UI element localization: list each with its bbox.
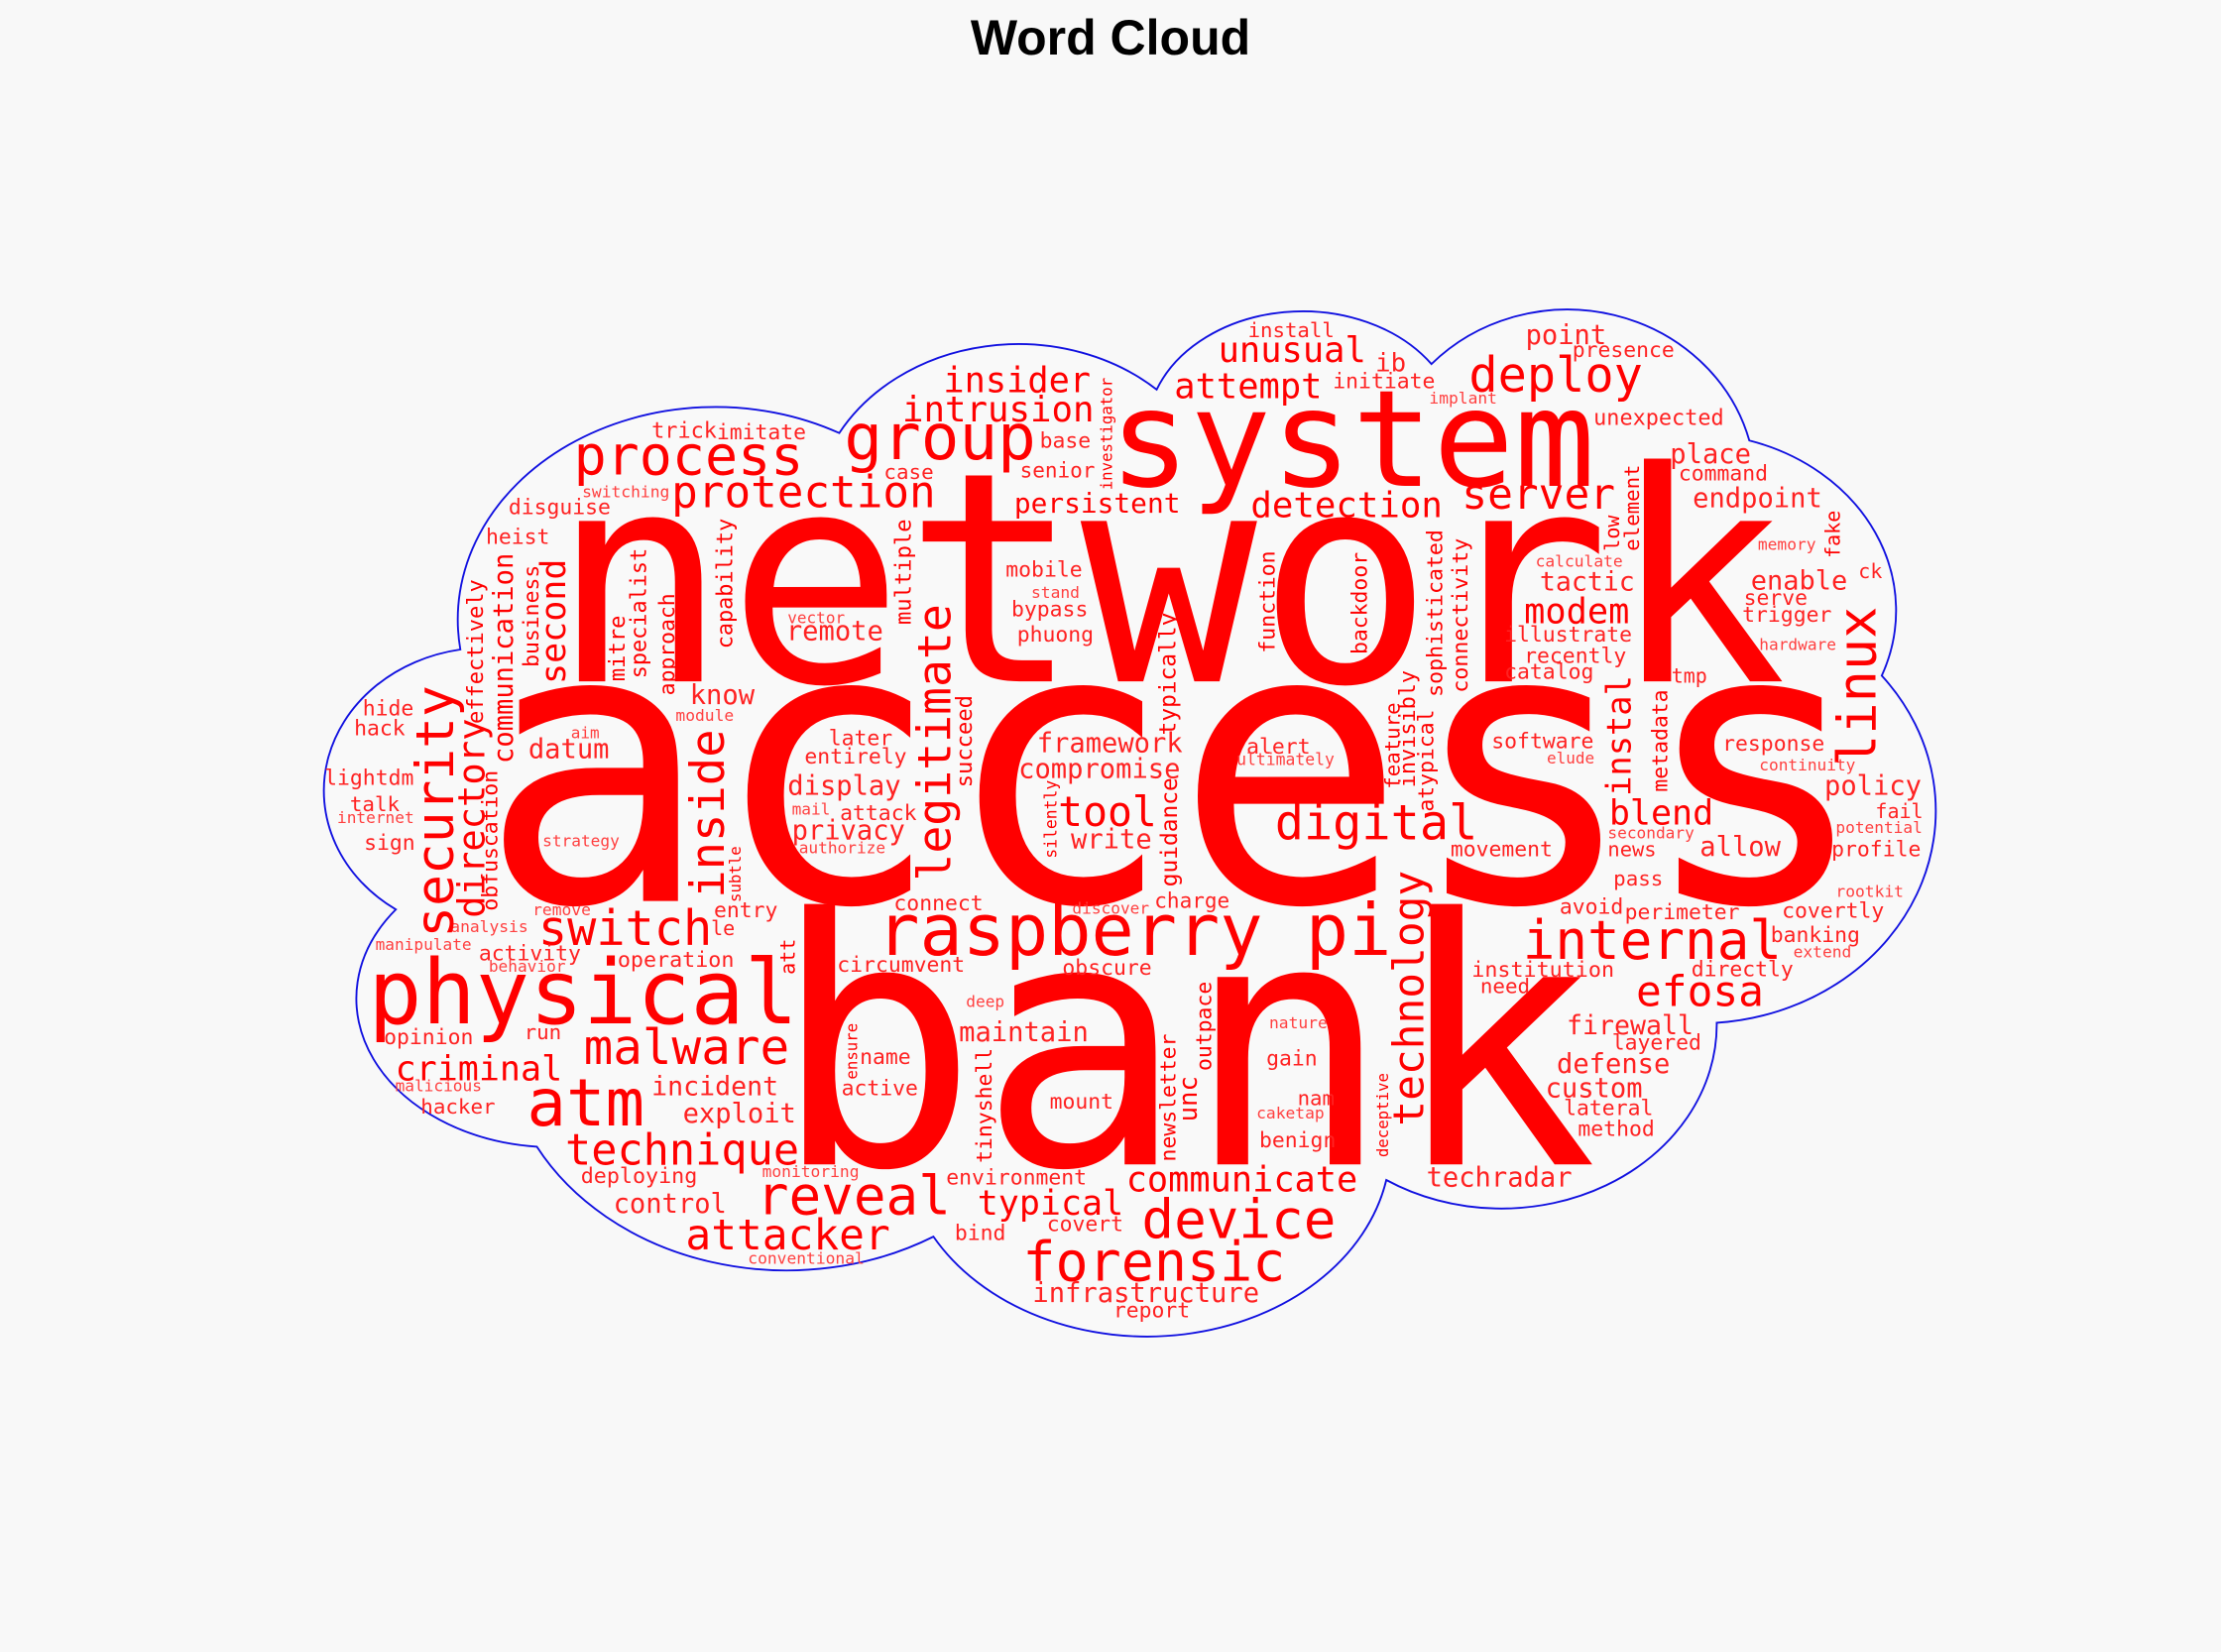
vertical words, right part: instal <box>1599 675 1638 796</box>
small horizontal words, left part: display <box>787 770 901 801</box>
word: process: process <box>574 424 803 488</box>
word: efosa: efosa <box>1636 967 1764 1016</box>
small horizontal words, left part: circumvent <box>837 953 965 978</box>
vertical words, left part: succeed <box>952 695 978 787</box>
word: deploy: deploy <box>1468 348 1643 404</box>
small horizontal words, right part: initiate <box>1333 369 1435 394</box>
tiny faded words: nature <box>1269 1013 1328 1032</box>
word: physical: physical <box>368 941 798 1045</box>
small horizontal words, left part: opinion <box>384 1025 473 1050</box>
vertical words, right part: sophisticated <box>1423 530 1448 697</box>
small horizontal words, left part <box>324 418 1259 1324</box>
word: bank: bank <box>772 846 1597 1245</box>
small horizontal words, left part: control <box>614 1189 727 1220</box>
small horizontal words, left part: know <box>690 680 756 711</box>
small horizontal words, right part: lateral <box>1564 1096 1653 1121</box>
tiny faded words: mail <box>792 799 830 818</box>
small horizontal words, left part: hacker <box>420 1095 496 1119</box>
small horizontal words, right part: directly <box>1692 957 1794 982</box>
small horizontal words, right part: unexpected <box>1593 407 1724 431</box>
word: protection: protection <box>671 467 936 518</box>
word: tool: tool <box>1058 788 1157 836</box>
vertical words, right part: unc <box>1174 1076 1204 1121</box>
tiny faded words: strategy <box>542 832 620 851</box>
vertical words, right part: metadata <box>1648 689 1673 792</box>
small horizontal words, right part: policy <box>1824 770 1922 801</box>
vertical words, right part: invisibly <box>1396 670 1421 787</box>
small horizontal words, right part: covertly <box>1782 899 1884 924</box>
tiny faded words: deep <box>966 993 1004 1011</box>
small horizontal words, left part: activity <box>479 942 581 967</box>
small horizontal words, left part: entry <box>714 898 778 923</box>
vertical words, left part: effectively <box>464 579 489 724</box>
vertical words, right part: guidance <box>1157 777 1183 886</box>
vertical words, left part: legitimate <box>908 604 962 882</box>
tiny faded words: malicious <box>396 1077 482 1096</box>
small horizontal words, left part: mount <box>1050 1090 1113 1115</box>
word: malware: malware <box>584 1018 789 1076</box>
tiny faded words: secondary <box>1607 824 1695 843</box>
small horizontal words, right part <box>1154 318 1924 1193</box>
small horizontal words, right part: profile <box>1831 838 1921 863</box>
vertical words, left part: communication <box>489 553 520 764</box>
small horizontal words, right part: benign <box>1259 1128 1336 1153</box>
small horizontal words, left part: environment <box>946 1165 1087 1190</box>
small horizontal words, right part: install <box>1248 318 1335 342</box>
word: reveal: reveal <box>757 1164 951 1227</box>
word: atm: atm <box>526 1066 644 1141</box>
vertical words, left part: tinyshell <box>973 1048 997 1163</box>
vertical words, left part: multiple <box>891 519 917 625</box>
small horizontal words, left part: connect <box>893 891 984 916</box>
small horizontal words, left part: operation <box>618 948 734 973</box>
tiny faded words: potential <box>1835 818 1923 837</box>
small horizontal words, left part: disguise <box>509 496 611 521</box>
vertical words, left part: inside <box>681 729 736 898</box>
small horizontal words, left part: sign <box>364 831 415 856</box>
vertical words, right part: feature <box>1380 702 1404 789</box>
tiny faded words: monitoring <box>762 1162 860 1181</box>
tiny faded words: elude <box>1547 749 1594 767</box>
vertical words, left part: capability <box>714 519 739 649</box>
medium horizontal words: unusual <box>1219 330 1366 371</box>
tiny faded words: discover <box>1072 898 1149 917</box>
small horizontal words, left part: obscure <box>1062 956 1152 981</box>
small horizontal words, left part: name <box>860 1045 911 1070</box>
small horizontal words, left part: report <box>1113 1299 1190 1324</box>
small horizontal words, right part: defense <box>1557 1049 1670 1080</box>
small horizontal words, right part: movement <box>1451 838 1553 863</box>
vertical words, left part: security <box>406 685 466 938</box>
small horizontal words, right part: tmp <box>1672 664 1707 688</box>
small horizontal words, right part: nam <box>1298 1086 1335 1110</box>
small horizontal words, left part: mobile <box>1005 557 1083 582</box>
small horizontal words, left part: remote <box>786 617 883 648</box>
medium horizontal words: attempt <box>1174 366 1323 407</box>
small horizontal words, right part: tactic <box>1540 567 1635 598</box>
small horizontal words, left part: framework <box>1037 729 1183 760</box>
tiny faded words: conventional <box>748 1248 865 1267</box>
small horizontal words, right part: alert <box>1246 735 1311 760</box>
vertical words, left part: specialist <box>627 548 651 678</box>
medium horizontal words: intrusion <box>902 390 1094 430</box>
tiny faded words: vector <box>787 609 845 628</box>
vertical words, right part: technology <box>1385 871 1435 1126</box>
word: device: device <box>1141 1189 1336 1251</box>
word: digital: digital <box>1275 795 1477 851</box>
word: internal: internal <box>1523 909 1782 972</box>
tiny faded words: rootkit <box>1835 882 1904 900</box>
vertical words, left part <box>406 519 1061 1163</box>
tiny faded words <box>337 389 1923 1267</box>
small horizontal words, left part: write <box>1071 825 1152 856</box>
cloud outline <box>324 309 1935 1337</box>
small horizontal words, right part: techradar <box>1427 1162 1573 1193</box>
small horizontal words, right part: firewall <box>1567 1010 1694 1041</box>
small horizontal words, left part: phuong <box>1017 623 1094 648</box>
small horizontal words, right part: software <box>1491 729 1593 754</box>
small horizontal words, left part: attack <box>840 801 917 826</box>
word: server: server <box>1461 470 1615 520</box>
small horizontal words, right part: need <box>1480 974 1530 998</box>
vertical words, left part: business <box>520 565 544 667</box>
small horizontal words, right part: method <box>1578 1118 1655 1142</box>
small horizontal words, left part: hide <box>363 696 413 721</box>
title: Word Cloud <box>971 10 1250 65</box>
vertical words, right part <box>1097 378 1888 1161</box>
vertical words, right part: outpace <box>1192 982 1217 1071</box>
tiny faded words: memory <box>1758 534 1816 553</box>
small horizontal words, right part: enable <box>1751 565 1847 596</box>
vertical words, right part: linux <box>1825 607 1888 767</box>
tiny faded words: authorize <box>799 839 885 858</box>
small horizontal words, right part: recently <box>1524 645 1626 669</box>
medium horizontal words: communicate <box>1126 1159 1357 1200</box>
vertical words, right part: investigator <box>1097 378 1115 490</box>
vertical words, left part: approach <box>655 593 680 695</box>
small horizontal words, right part: avoid <box>1560 894 1623 919</box>
small horizontal words, right part: news <box>1607 838 1657 862</box>
tiny faded words: aim <box>571 723 600 742</box>
small horizontal words, left part: talk <box>350 792 401 816</box>
word: switch: switch <box>538 901 712 957</box>
tiny faded words: continuity <box>1759 756 1856 774</box>
small horizontal words, left part: deploying <box>581 1164 697 1189</box>
medium horizontal words: typical <box>978 1184 1123 1224</box>
small horizontal words, left part: exploit <box>683 1099 796 1129</box>
small horizontal words, right part: ck <box>1858 559 1882 583</box>
tiny faded words: hardware <box>1759 636 1836 654</box>
small horizontal words, left part: incident <box>651 1071 778 1102</box>
word: forensic: forensic <box>1022 1230 1285 1293</box>
tiny faded words: extend <box>1794 943 1851 962</box>
small horizontal words, right part: presence <box>1573 338 1675 363</box>
small horizontal words, right part: allow <box>1699 832 1782 863</box>
small horizontal words, right part: illustrate <box>1504 623 1632 648</box>
small horizontal words, right part: command <box>1679 461 1768 486</box>
small horizontal words, left part: entirely <box>804 745 907 769</box>
small horizontal words, right part: serve <box>1744 586 1808 611</box>
vertical words, right part: backdoor <box>1348 552 1373 654</box>
tiny faded words: calculate <box>1536 551 1623 570</box>
small horizontal words, left part: heist <box>486 526 549 550</box>
small horizontal words, left part: imitate <box>717 420 806 445</box>
small horizontal words, right part: endpoint <box>1693 483 1822 514</box>
tiny faded words: internet <box>337 808 414 827</box>
small horizontal words, left part: infrastructure <box>1032 1278 1259 1309</box>
small horizontal words, right part: banking <box>1771 923 1860 948</box>
vertical words, right part: function <box>1256 550 1281 653</box>
small horizontal words, right part: place <box>1670 439 1751 470</box>
small horizontal words, right part: response <box>1722 732 1824 757</box>
word cloud <box>324 318 1924 1324</box>
vertical words, left part: directory <box>451 719 494 918</box>
tiny faded words: switching <box>582 482 669 501</box>
tiny faded words: behavior <box>489 957 566 976</box>
vertical words, right part: low <box>1600 515 1624 551</box>
vertical words, left part: ensure <box>842 1023 861 1080</box>
vertical words, right part: connectivity <box>1449 538 1473 693</box>
small horizontal words, right part: institution <box>1471 958 1614 983</box>
small horizontal words, right part: pass <box>1613 867 1663 890</box>
medium horizontal words: persistent <box>1014 487 1180 520</box>
vertical words, right part: element <box>1620 464 1644 551</box>
vertical words, left part: silently <box>1042 780 1061 859</box>
word: raspberry pi: raspberry pi <box>877 888 1391 972</box>
small horizontal words, right part: charge <box>1154 889 1229 913</box>
vertical words, left part: mitre <box>605 616 631 681</box>
medium horizontal words: criminal <box>396 1049 562 1089</box>
small horizontal words, right part: ib <box>1375 348 1406 378</box>
medium horizontal words <box>396 330 1713 1224</box>
tiny faded words: stand <box>1031 583 1080 602</box>
vertical words, right part: atypical <box>1415 709 1440 812</box>
medium horizontal words: insider <box>943 361 1091 402</box>
small horizontal words, left part: covert <box>1047 1212 1123 1237</box>
tiny faded words: analysis <box>450 917 528 936</box>
tiny faded words: manipulate <box>376 935 472 954</box>
small horizontal words, left part: trick <box>651 418 717 443</box>
medium horizontal words: detection <box>1250 485 1443 526</box>
word: network: network <box>551 410 1787 751</box>
vertical words, right part: deceptive <box>1373 1073 1392 1157</box>
small horizontal words, left part: bypass <box>1011 597 1088 622</box>
small horizontal words, right part: layered <box>1612 1031 1701 1056</box>
small horizontal words, left part: le <box>711 916 735 940</box>
small horizontal words, left part: datum <box>528 734 610 765</box>
small horizontal words, right part: perimeter <box>1625 900 1740 925</box>
vertical words, right part: typically <box>1156 613 1182 735</box>
word: group: group <box>844 401 1036 475</box>
vertical words, right part: newsletter <box>1157 1033 1182 1161</box>
small horizontal words, left part: active <box>842 1076 918 1101</box>
small horizontal words, right part: gain <box>1266 1046 1318 1071</box>
small horizontal words, left part: compromise <box>1018 754 1180 784</box>
small horizontal words, right part: trigger <box>1742 603 1831 628</box>
tiny faded words: implant <box>1429 389 1497 408</box>
vertical words, left part: subtle <box>726 846 745 902</box>
tiny faded words: remove <box>532 900 591 919</box>
vertical words, right part: fake <box>1821 511 1845 558</box>
small horizontal words, right part: point <box>1526 320 1606 351</box>
small horizontal words, left part: senior <box>1020 458 1095 482</box>
tiny faded words: caketap <box>1256 1104 1325 1122</box>
small horizontal words, left part: bind <box>955 1222 1005 1246</box>
medium horizontal words: modem <box>1524 592 1629 633</box>
tiny faded words: ultimately <box>1236 750 1335 768</box>
vertical words, left part: obfuscation <box>478 770 503 911</box>
small horizontal words, right part: fail <box>1875 799 1924 823</box>
small horizontal words, left part: run <box>525 1020 561 1044</box>
vertical words, left part: att <box>775 939 799 975</box>
vertical words, left part: second <box>534 559 574 684</box>
tiny faded words: module <box>675 706 734 725</box>
small horizontal words, left part: hack <box>354 716 406 741</box>
small horizontal words, left part: base <box>1040 428 1091 453</box>
word: access: access <box>479 543 1870 993</box>
word: technique: technique <box>565 1125 799 1175</box>
small horizontal words, left part: lightdm <box>324 766 413 790</box>
small horizontal words, left part: later <box>829 726 892 751</box>
small horizontal words, right part: catalog <box>1504 659 1593 684</box>
word: attacker: attacker <box>685 1211 890 1260</box>
medium horizontal words: blend <box>1609 793 1713 833</box>
word: system: system <box>1110 362 1595 519</box>
small horizontal words, left part: maintain <box>959 1017 1089 1048</box>
small horizontal words, left part: case <box>883 460 934 484</box>
small horizontal words, right part: custom <box>1546 1073 1643 1104</box>
small horizontal words, left part: privacy <box>792 815 905 846</box>
